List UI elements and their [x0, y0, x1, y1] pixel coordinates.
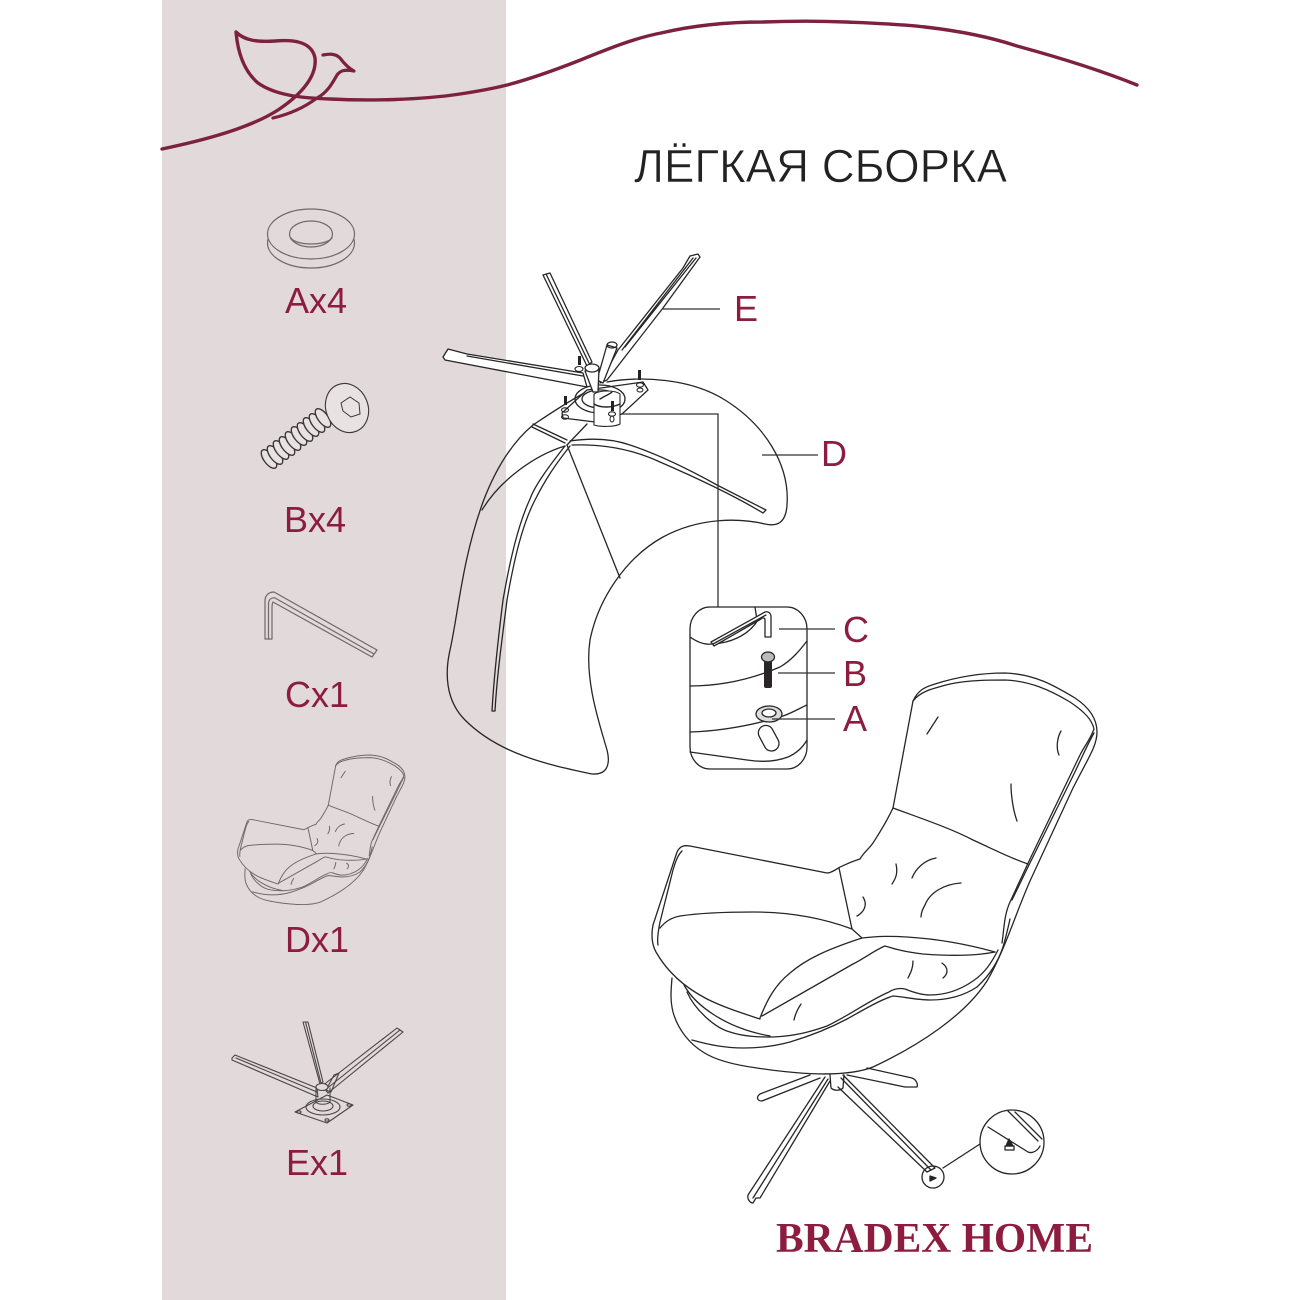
assembly diagram: upturned seat shell — [447, 379, 787, 774]
part E: base with legs — [232, 1022, 403, 1123]
assembled chair: legs — [748, 1068, 935, 1203]
title: ЛЁГКАЯ СБОРКА — [634, 140, 1007, 192]
panel: parts list background — [162, 0, 506, 1300]
part A: washer — [268, 209, 354, 268]
label: A: A — [843, 698, 867, 739]
assembled chair: seat — [652, 673, 1097, 1074]
arrow: connector to detail inset — [621, 414, 718, 607]
leader: label B — [778, 672, 835, 674]
label: D: D — [821, 433, 847, 474]
label: Ex1: Ex1 — [286, 1142, 348, 1183]
leader: label D — [762, 454, 818, 456]
label: Bx4: Bx4 — [284, 499, 346, 540]
part D: chair seat shell — [238, 755, 405, 905]
part C: hex key — [265, 592, 377, 657]
label: B: B — [843, 653, 867, 694]
assembly diagram: small screws and holes — [562, 356, 644, 422]
label: Cx1: Cx1 — [285, 674, 349, 715]
leader: label A — [772, 718, 835, 720]
label: C: C — [843, 609, 869, 650]
label: E: E — [734, 288, 758, 329]
part B: screw — [258, 377, 376, 471]
label: Dx1: Dx1 — [285, 919, 349, 960]
leader: label E — [663, 308, 720, 310]
leader: label C — [779, 628, 835, 630]
logo: bird and swoosh line — [162, 21, 1137, 149]
detail circle: foot screw — [922, 1110, 1044, 1188]
detail inset with screw, washer and key — [690, 607, 807, 769]
brand name: BRADEX HOME — [776, 1215, 1093, 1262]
label: Ax4: Ax4 — [285, 280, 347, 321]
assembly diagram: base with legs and plate — [443, 254, 700, 426]
